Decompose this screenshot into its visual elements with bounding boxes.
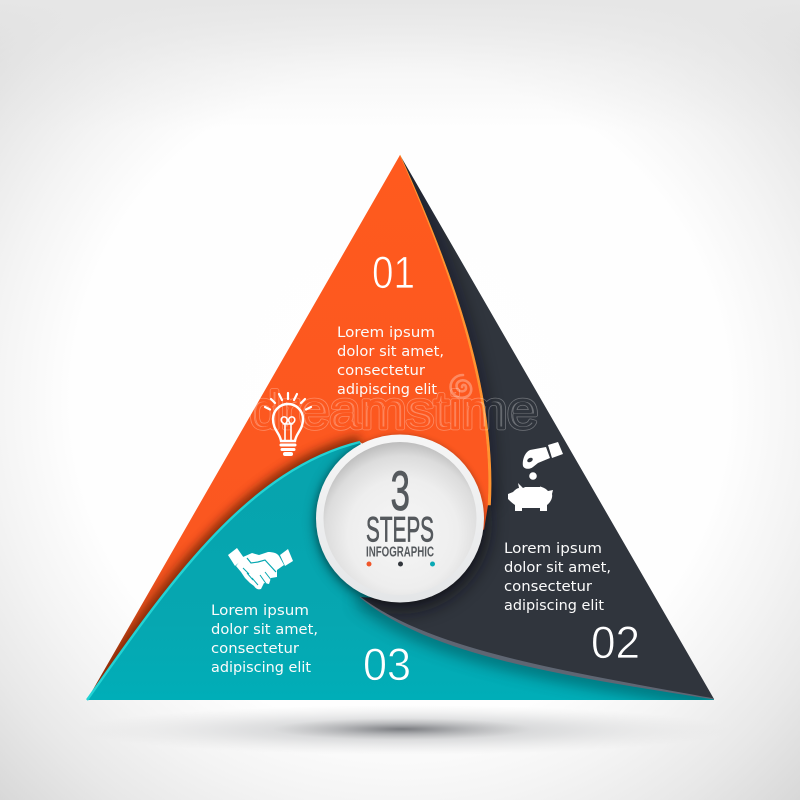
text block 03: dolor sit amet, (211, 622, 318, 638)
ground shadow (80, 705, 730, 755)
text block 03: Lorem ipsum (211, 603, 309, 619)
text block 03 (211, 603, 318, 676)
dot: teal (430, 562, 435, 566)
text block 02 (504, 541, 611, 614)
text block 02: dolor sit amet, (504, 560, 611, 576)
text block 01: consectetur (337, 363, 425, 379)
text block 02: Lorem ipsum (504, 541, 602, 557)
text block 01: adipiscing elit (337, 382, 437, 398)
text block 02: consectetur (504, 579, 592, 595)
number 02: 02 (591, 617, 640, 668)
panel: 03 teal segment (87, 434, 714, 700)
panel: 02 dark segment (361, 156, 714, 698)
curved lower edge of dark segment (360, 597, 714, 699)
icon: light bulb (265, 393, 311, 454)
text block 02: adipiscing elit (504, 598, 604, 614)
inner disc (324, 442, 476, 595)
outer ring (316, 434, 484, 602)
number 03: 03 (363, 639, 411, 690)
dot: dark (398, 562, 403, 566)
panel: 01 orange segment (87, 155, 491, 700)
text block 03: adipiscing elit (211, 660, 311, 676)
label: infographic: INFOGRAPHIC (366, 544, 434, 560)
watermark (250, 374, 538, 431)
icon: hand and piggy bank (508, 442, 563, 511)
text block 01 (337, 325, 444, 398)
text block 01: dolor sit amet, (337, 344, 444, 360)
center circle badge (315, 434, 485, 605)
icon: handshake (228, 548, 293, 589)
dot: orange (366, 562, 372, 566)
text block 01: Lorem ipsum (337, 325, 435, 341)
big number 3: 3 (390, 459, 410, 522)
number 01: 01 (372, 247, 415, 298)
label: steps: STEPS (366, 510, 434, 550)
triangle infographic (87, 155, 714, 700)
text block 03: consectetur (211, 641, 299, 657)
